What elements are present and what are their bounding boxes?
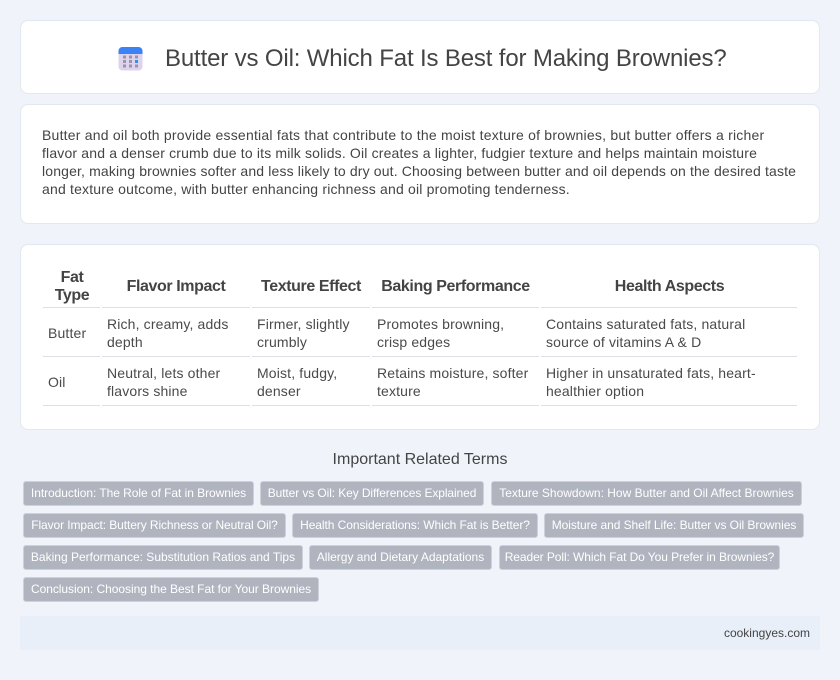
footer bar xyxy=(20,616,820,650)
related terms tags: Conclusion: Choosing the Best Fat for Your Brownies xyxy=(31,582,311,596)
row: butter: Contains saturated fats, natural xyxy=(546,316,745,332)
row: oil: Higher in unsaturated fats, heart- xyxy=(546,365,756,381)
row: oil: flavors shine xyxy=(107,383,188,399)
intro text: and texture outcome, with butter enhancing richness and oil promoting tenderness. xyxy=(42,181,570,197)
intro text: Butter and oil both provide essential fats that contribute to the moist texture of brownies, but butter offers a richer xyxy=(42,127,764,143)
related terms tags: Flavor Impact: Buttery Richness or Neutral Oil? xyxy=(31,518,278,532)
row: oil xyxy=(48,365,756,399)
related terms tags: Texture Showdown: How Butter and Oil Affect Brownies xyxy=(499,486,794,500)
table header: Baking Performance xyxy=(381,278,530,295)
row: butter: depth xyxy=(107,334,143,350)
intro text: longer, making brownies softer and less likely to dry out. Choosing between butter and oil depends on the desired taste xyxy=(42,163,796,179)
row: butter: Promotes browning, xyxy=(377,316,504,332)
row: oil: healthier option xyxy=(546,383,644,399)
related terms tags: Introduction: The Role of Fat in Brownies xyxy=(31,486,246,500)
table header: Texture Effect xyxy=(261,278,361,295)
related terms heading: Important Related Terms xyxy=(333,451,507,468)
comparison table panel xyxy=(20,244,820,430)
related terms tags: Butter vs Oil: Key Differences Explained xyxy=(268,486,476,500)
related terms tags xyxy=(23,481,804,602)
table header: Flavor Impact xyxy=(127,278,225,295)
title: Butter vs Oil: Which Fat Is Best for Making Brownies? xyxy=(165,45,727,72)
row: oil: denser xyxy=(257,383,301,399)
row: oil: Neutral, lets other xyxy=(107,365,220,381)
row: butter: crumbly xyxy=(257,334,307,350)
icon: calendar xyxy=(118,47,142,70)
footer source: cookingyes.com xyxy=(724,626,810,640)
row: butter: Firmer, slightly xyxy=(257,316,350,332)
row: butter xyxy=(48,316,745,350)
intro text: flavor and a denser crumb due to its milk solids. Oil creates a lighter, fudgier texture and helps maintain moisture xyxy=(42,145,757,161)
table header xyxy=(54,269,724,304)
related terms tags: Health Considerations: Which Fat is Better? xyxy=(300,518,530,532)
intro text xyxy=(42,127,796,197)
related terms tags: Allergy and Dietary Adaptations xyxy=(317,550,484,564)
related terms tags: Baking Performance: Substitution Ratios and Tips xyxy=(31,550,295,564)
row: butter: source of vitamins A & D xyxy=(546,334,701,350)
row: oil: Oil xyxy=(48,374,66,390)
related terms tags: Moisture and Shelf Life: Butter vs Oil Brownies xyxy=(552,518,796,532)
row: butter: crisp edges xyxy=(377,334,450,350)
related terms tags: Reader Poll: Which Fat Do You Prefer in Brownies? xyxy=(505,550,774,564)
table header: Fat xyxy=(61,269,83,286)
row: butter: Rich, creamy, adds xyxy=(107,316,228,332)
row: oil: Moist, fudgy, xyxy=(257,365,337,381)
table header: Type xyxy=(55,287,89,304)
row: oil: Retains moisture, softer xyxy=(377,365,528,381)
intro panel xyxy=(20,104,820,224)
title panel xyxy=(20,20,820,94)
row: butter: Butter xyxy=(48,325,86,341)
row: oil: texture xyxy=(377,383,421,399)
table header: Health Aspects xyxy=(615,278,724,295)
